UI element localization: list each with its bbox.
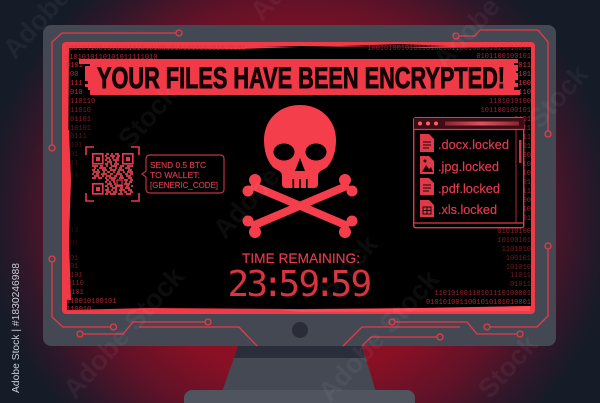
screen bbox=[62, 42, 535, 314]
panel: locked files window bbox=[414, 118, 524, 228]
binary code rain: bottom right: 10100101 bbox=[497, 237, 531, 245]
text: jpg locked: .jpg.locked bbox=[438, 159, 499, 174]
title banner bbox=[79, 59, 520, 95]
binary code rain: top right: 100101001010110100101100100101011010010 bbox=[367, 45, 531, 53]
countdown label: TIME REMAINING: bbox=[242, 250, 360, 266]
binary code rain: top right: 101 bbox=[518, 143, 531, 151]
binary code rain: bottom left: 01 bbox=[70, 255, 78, 263]
binary code rain: top left: 110110 bbox=[70, 98, 95, 106]
callout: ransom payment instructions: [GENERIC_CODE] bbox=[150, 181, 218, 190]
binary code rain: bottom right: 1101010 bbox=[502, 246, 531, 254]
binary code rain: bottom right: 11011 bbox=[510, 272, 531, 280]
binary code rain: bottom left: 101 bbox=[70, 272, 83, 280]
icon: jpg file bbox=[420, 156, 434, 174]
binary code rain: top right: 010 bbox=[518, 161, 531, 169]
binary code rain: top left: 10101 bbox=[70, 125, 91, 133]
binary code rain: top left: 10 bbox=[70, 173, 78, 181]
binary code rain: top left: 0101010110101011111010 bbox=[65, 54, 157, 62]
icon: docx file bbox=[420, 134, 434, 152]
binary code rain: top right: 110 bbox=[518, 206, 531, 214]
skull and crossbones icon bbox=[242, 105, 358, 238]
binary code rain: bottom left: 01 bbox=[70, 263, 78, 271]
QR code with corner brackets bbox=[86, 147, 139, 201]
binary code rain: top left: 101 bbox=[70, 142, 83, 150]
watermarks: Stock bbox=[522, 59, 594, 134]
binary code rain: top right bbox=[367, 45, 531, 223]
binary code rain: bottom right: 101010 bbox=[506, 264, 531, 272]
binary code rain: top left: 0101 bbox=[66, 62, 83, 70]
binary code rain: bottom left bbox=[66, 255, 116, 314]
binary code rain: top left: 111 bbox=[70, 80, 83, 88]
binary code rain: bottom right: 100101 bbox=[506, 255, 531, 263]
watermarks: Stock bbox=[472, 329, 544, 403]
binary code rain: top left: 01101 bbox=[70, 116, 91, 124]
binary code rain: top right: 0101100100101 bbox=[476, 53, 531, 61]
countdown timer: 23:59:59 bbox=[228, 264, 372, 305]
icon: pdf file bbox=[420, 178, 434, 195]
text: pdf locked: .pdf.locked bbox=[438, 181, 500, 196]
binary code rain: top right: 1101010100 bbox=[489, 98, 531, 106]
binary code rain: top left: 1001011001010101010101001010101010101010101 bbox=[65, 45, 246, 53]
text: docx locked: .docx.locked bbox=[438, 137, 509, 152]
binary code rain: bottom left: 0110 bbox=[67, 280, 84, 288]
binary code rain: bottom left: 110010 bbox=[66, 306, 91, 314]
monitor bezel bbox=[43, 25, 556, 346]
binary code rain: top left: 11 bbox=[70, 160, 78, 168]
binary code rain: top right: 0101 bbox=[514, 116, 531, 124]
binary code rain: top left: 01 bbox=[70, 151, 78, 159]
callout: ransom payment instructions bbox=[142, 155, 224, 193]
binary code rain: bottom left: 110010100101 bbox=[66, 298, 116, 306]
callout: ransom payment instructions: SEND 0.5 BTC bbox=[150, 161, 206, 170]
monitor stand bbox=[184, 346, 415, 403]
binary code rain: top left: 01 bbox=[70, 240, 78, 248]
watermarks: Adobe bbox=[207, 162, 286, 244]
watermarks: Adobe Stock bbox=[312, 264, 446, 403]
binary code rain: top right: 101 bbox=[518, 215, 531, 223]
stock credit: Adobe Stock | #1830246988 bbox=[10, 263, 22, 393]
text: xls locked: .xls.locked bbox=[438, 202, 497, 217]
webcam bbox=[292, 322, 308, 338]
watermarks: Adobe Stock bbox=[57, 261, 191, 403]
binary code rain: top right: 011 bbox=[518, 62, 531, 70]
binary code rain: top left: 0111 bbox=[70, 133, 87, 141]
binary code rain: top right: 11 bbox=[523, 125, 531, 133]
binary code rain: bottom right: 0101010011001010101010001 bbox=[426, 299, 531, 307]
callout: ransom payment instructions: TO WALLET: bbox=[150, 171, 200, 180]
binary code rain: top right: 011 bbox=[518, 188, 531, 196]
binary code rain: top left bbox=[65, 45, 246, 248]
binary code rain: bottom right: 11010100110101110100001 bbox=[434, 290, 531, 298]
binary code rain: top right: 101 bbox=[518, 71, 531, 79]
binary code rain: bottom right: 01011 bbox=[510, 281, 531, 289]
circuit traces bbox=[49, 30, 551, 346]
binary code rain: top right: 100 bbox=[518, 197, 531, 205]
binary code rain: bottom right: 01010100 bbox=[497, 228, 531, 236]
watermarks: Stock bbox=[312, 229, 384, 304]
binary code rain: top right: 011 bbox=[518, 134, 531, 142]
binary code rain: top right: 110 bbox=[518, 170, 531, 178]
binary code rain: top left: 00 bbox=[70, 71, 78, 79]
binary code rain: top right: 100 bbox=[518, 80, 531, 88]
binary code rain: top left: 010 bbox=[70, 89, 83, 97]
icon: xls file bbox=[420, 200, 434, 217]
binary code rain: top right: 100 bbox=[518, 152, 531, 160]
watermarks: Stock bbox=[112, 79, 184, 154]
binary code rain: bottom right bbox=[426, 228, 531, 307]
binary code rain: top right: 110 bbox=[518, 89, 531, 97]
binary code rain: top left: 10 bbox=[70, 227, 78, 235]
binary code rain: bottom left: 0101 bbox=[67, 289, 84, 297]
binary code rain: top right: 101 bbox=[518, 179, 531, 187]
binary code rain: top right: 101100100101 bbox=[481, 107, 531, 115]
binary code rain: top left: 11010 bbox=[70, 107, 91, 115]
